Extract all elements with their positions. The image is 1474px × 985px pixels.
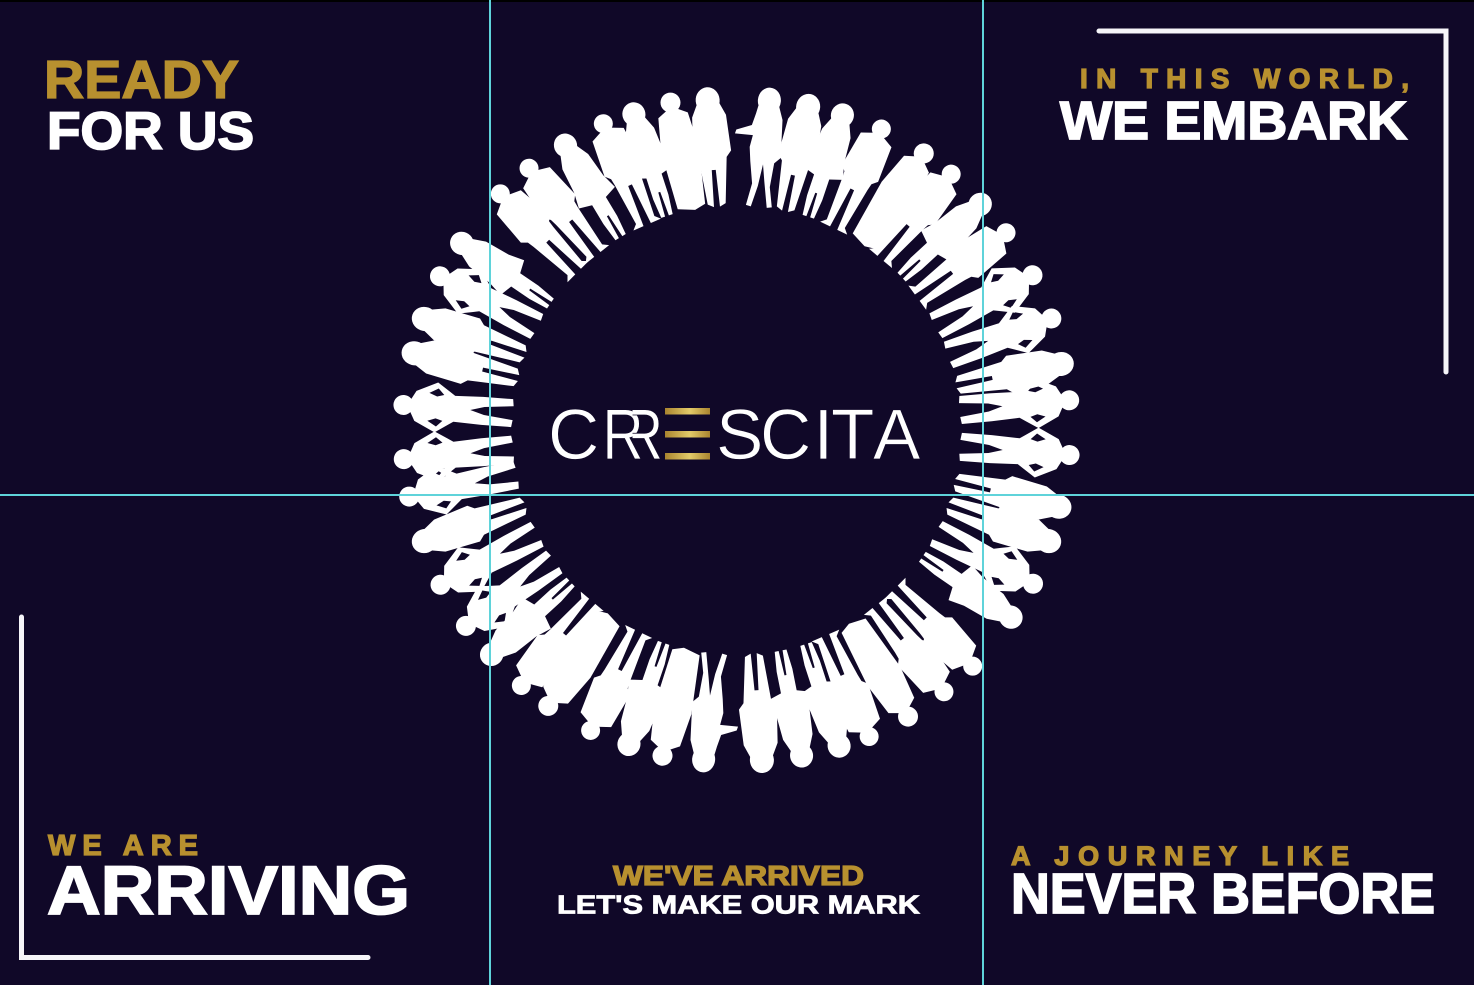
logo: gold bars forming the E: [665, 408, 710, 460]
heading: a journey like never before: A JOURNEY LIKE: [1011, 841, 1349, 871]
heading: in this world, we embark: WE EMBARK: [1060, 91, 1407, 151]
people ring: [392, 85, 1081, 775]
heading: we are arriving: WE ARE: [48, 830, 198, 862]
heading: a journey like never before: NEVER BEFORE: [1011, 862, 1435, 926]
logo: Crescita wordmark: SCITA: [716, 396, 921, 475]
heading: we've arrived, let's make our mark: LET'S MAKE OUR MARK: [557, 890, 920, 920]
heading: we are arriving: ARRIVING: [47, 852, 410, 929]
logo: Crescita wordmark: C: [548, 396, 599, 475]
frame: top right corner: [1099, 31, 1446, 372]
heading: we've arrived, let's make our mark: [557, 860, 920, 920]
frame: bottom left corner: [22, 617, 368, 958]
logo: Crescita wordmark: [552, 408, 920, 460]
logo: Crescita wordmark: R: [622, 395, 663, 474]
heading: ready for us: READY: [44, 50, 239, 110]
heading: ready for us: FOR US: [47, 102, 254, 161]
heading: in this world, we embark: [1060, 63, 1409, 151]
heading: we've arrived, let's make our mark: WE'VE ARRIVED: [613, 860, 864, 891]
logo: Crescita wordmark: R: [602, 395, 644, 474]
heading: ready for us: [44, 50, 254, 161]
heading: in this world, we embark: IN THIS WORLD,: [1080, 63, 1409, 94]
